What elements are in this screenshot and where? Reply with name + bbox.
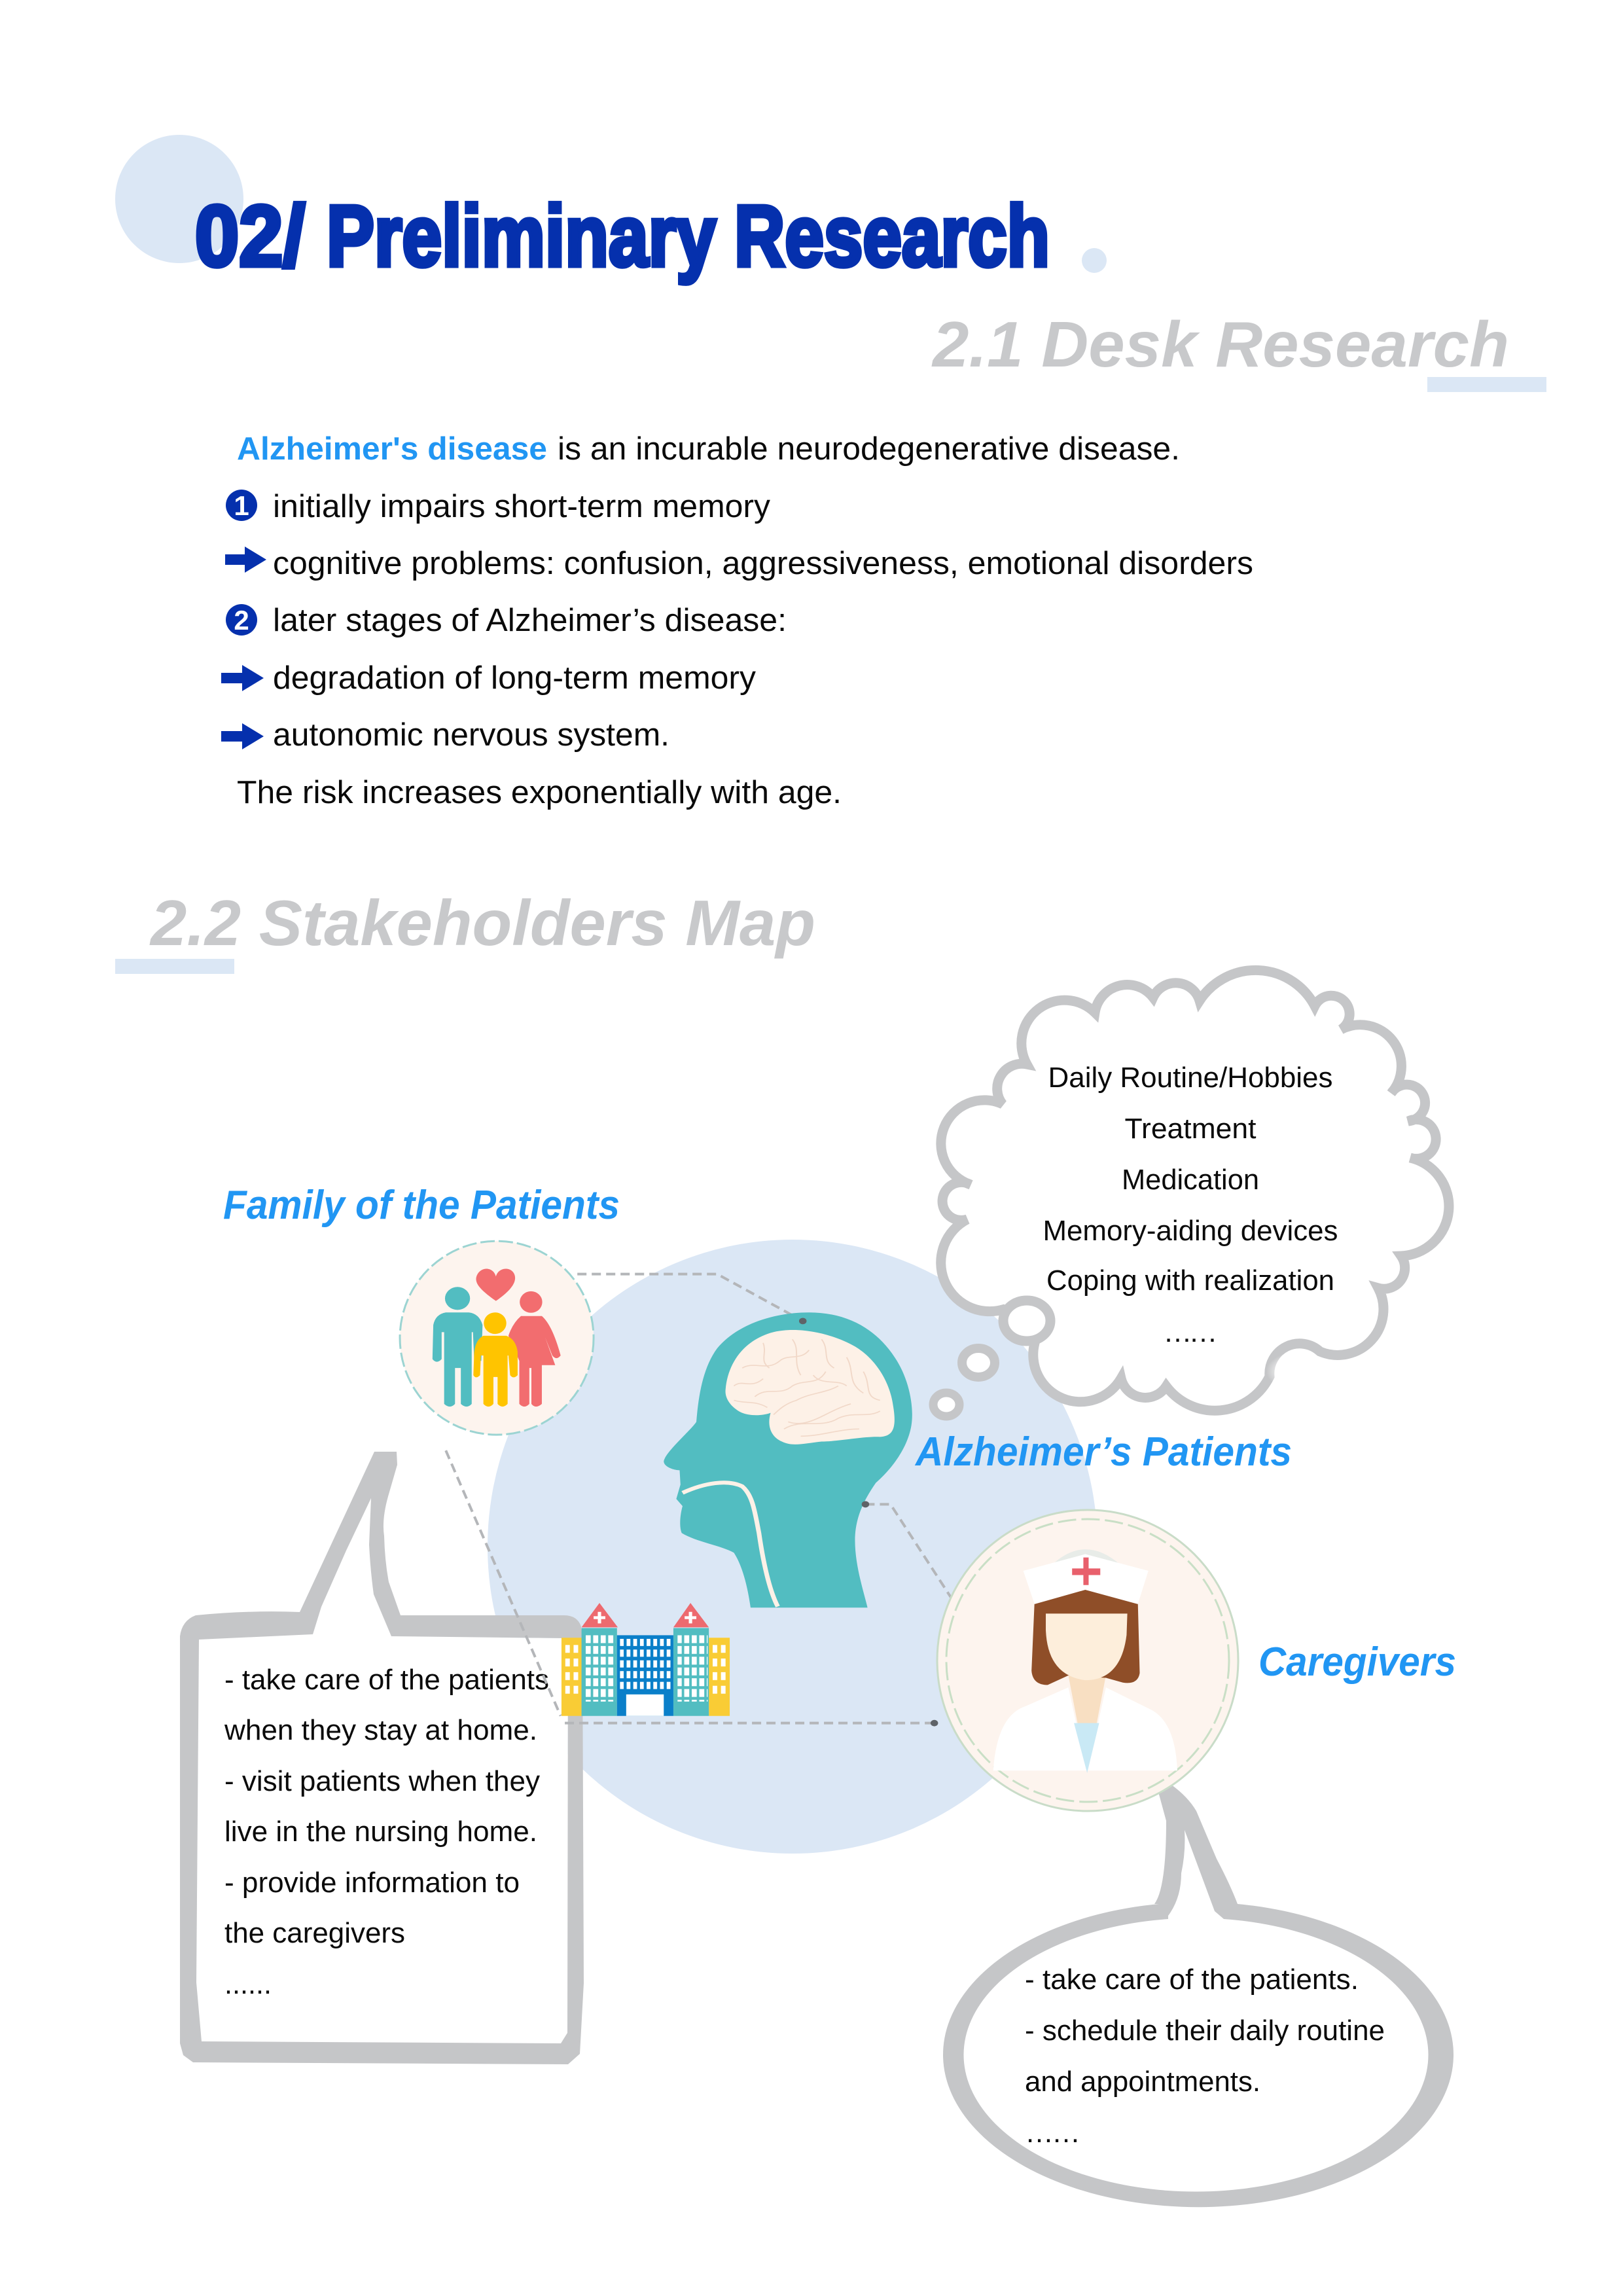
point autonomic nervous system: autonomic nervous system. [273,717,669,753]
cloud text: …… [1164,1316,1217,1348]
icon: hospital [562,1603,730,1716]
connector lines [446,1274,951,1723]
intro sentence: is an incurable neurodegenerative disease. [558,431,1180,467]
label: family of the patients: Family of the Patients [223,1183,620,1228]
point two: later stages of Alzheimer’s disease: [273,603,787,638]
text block: desk research findings [221,431,1253,810]
speech bubble: family of the patients [180,1452,584,2064]
icon: family [400,1241,594,1435]
bubble text [224,1664,549,2000]
bubble text: and appointments. [1025,2066,1260,2098]
point one: initially impairs short-term memory [273,489,770,524]
cloud text [1043,1062,1338,1348]
bubble text: - visit patients when they [224,1765,540,1797]
decorative circle behind title [115,135,243,263]
bubble text: - schedule their daily routine [1025,2015,1385,2047]
speech bubble: caregivers [943,1785,1454,2207]
bubble text: the caregivers [224,1917,405,1949]
title: Preliminary [327,188,716,284]
bubble text: when they stay at home. [224,1714,537,1746]
cloud text: Medication [1122,1164,1259,1196]
thought bubbles [933,1300,1050,1416]
arrow two [221,665,264,691]
label: alzheimer's patients: Alzheimer’s Patients [914,1429,1292,1475]
background circle of stakeholder map [488,1240,1097,1854]
icon: caregiver nurse [937,1510,1238,1811]
arrow one [225,547,266,573]
intro sentence [237,431,1180,467]
bubble text: ...... [224,1968,272,2000]
arrow three [221,723,264,749]
icon: patient head with brain [664,1312,938,1727]
cloud text: Treatment [1124,1113,1257,1145]
closing sentence: The risk increases exponentially with age. [237,775,842,810]
cloud text: Memory-aiding devices [1043,1215,1338,1247]
label: caregivers: Caregivers [1258,1640,1456,1685]
bubble text: - provide information to [224,1867,520,1899]
bubble text: - take care of the patients [224,1664,549,1696]
icon: number one: 1 [234,490,249,521]
bubble text: …… [1025,2117,1080,2149]
heading: 2.2 Stakeholders Map: 2.2 Stakeholders Map [149,887,815,959]
intro sentence: Alzheimer's disease [237,431,547,467]
point cognitive problems: cognitive problems: confusion, aggressiveness, emotional disorders [273,546,1253,581]
bubble text [1025,1964,1385,2149]
cloud text: Daily Routine/Hobbies [1048,1062,1332,1094]
point long-term memory: degradation of long-term memory [273,660,757,696]
icon: number two [226,604,257,636]
bubble text: live in the nursing home. [224,1816,537,1848]
icon: number two: 2 [234,605,249,636]
title: 02/ [195,188,305,284]
title: Research [734,188,1050,284]
decorative dot [1082,248,1107,273]
bubble text: - take care of the patients. [1025,1964,1359,1996]
thought cloud: patients [933,970,1449,1416]
icon: number one [226,490,257,521]
heading: 2.1 Desk Research: 2.1 Desk Research [931,308,1509,380]
title [195,188,1050,284]
cloud text: Coping with realization [1046,1265,1334,1297]
